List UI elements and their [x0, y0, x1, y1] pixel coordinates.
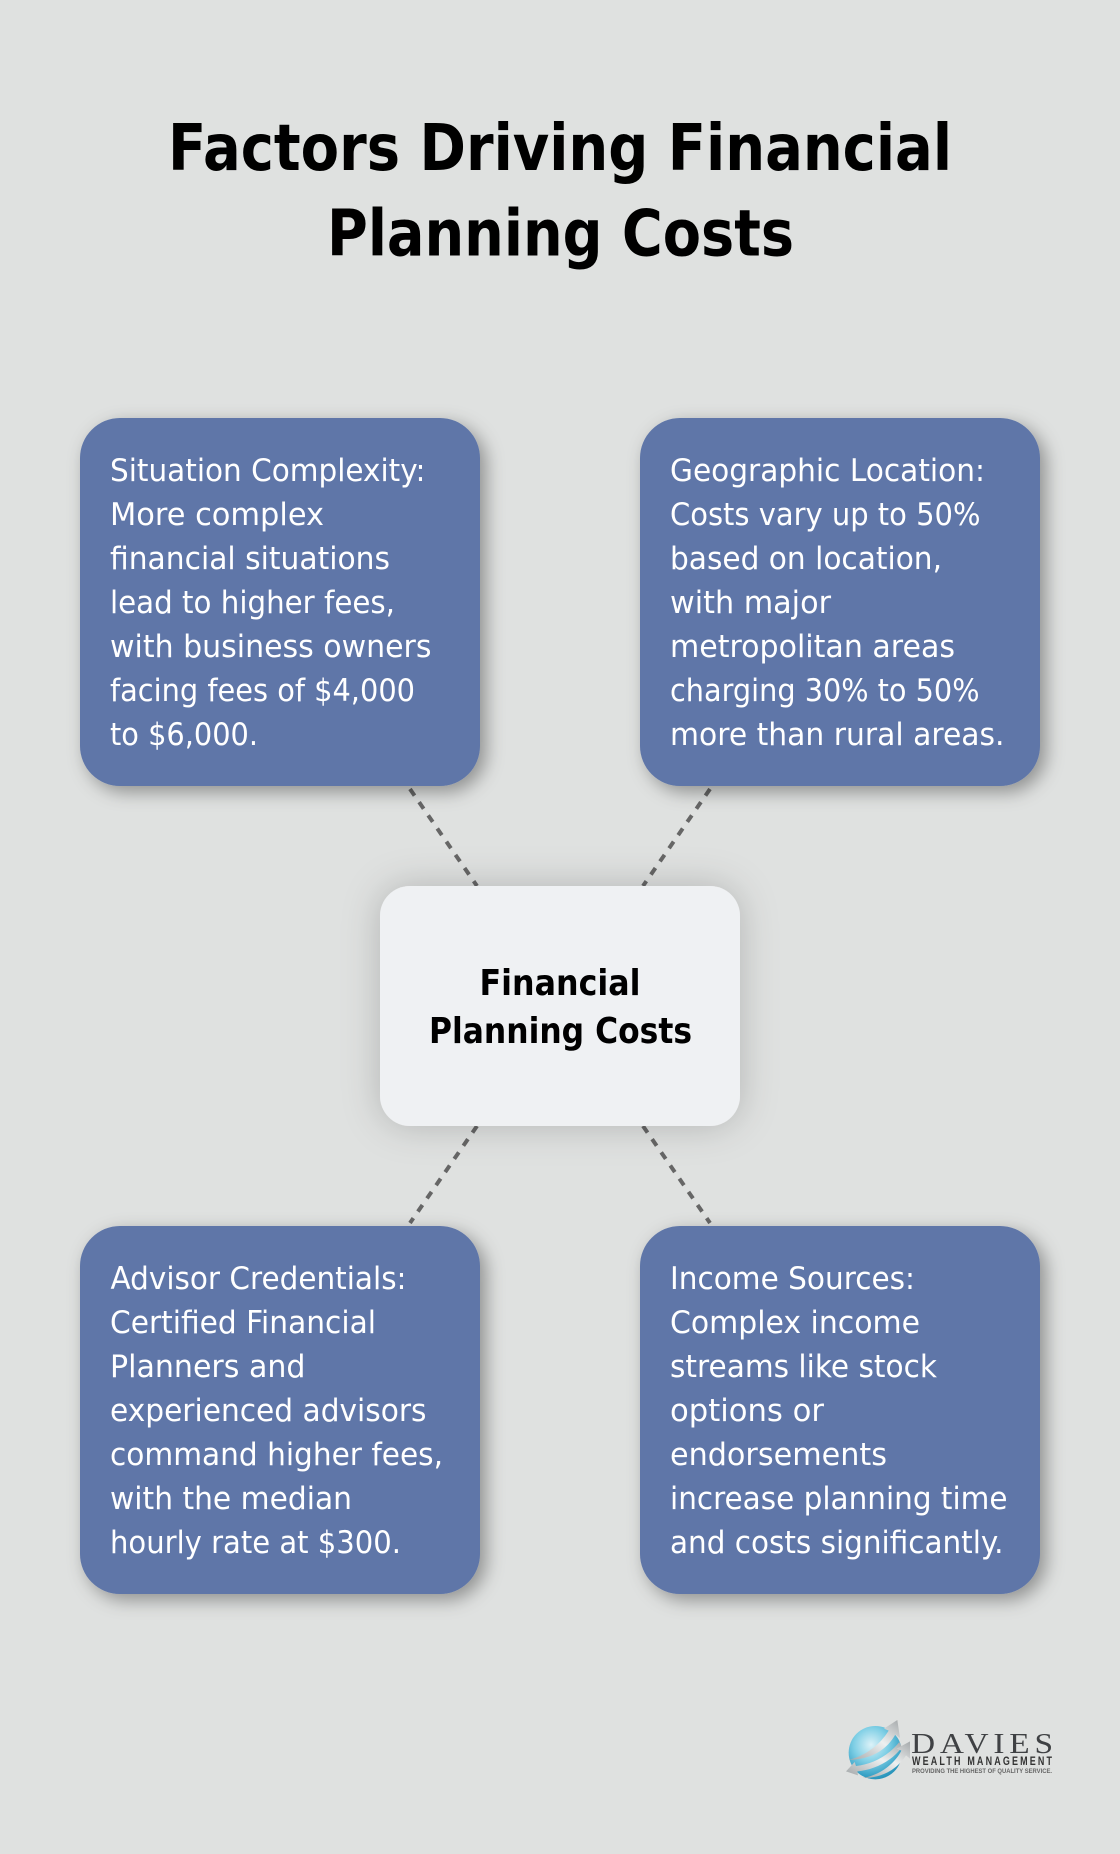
- panel: center node: Planning Costs: [429, 1011, 692, 1052]
- panel: advisor credentials: command higher fees,: [110, 1437, 443, 1473]
- title: Planning Costs: [327, 198, 794, 272]
- panel: income sources: Complex income: [670, 1305, 920, 1341]
- panel: advisor credentials: Planners and: [110, 1349, 306, 1385]
- panel: situation complexity: [80, 418, 480, 786]
- panel: center node: Financial: [480, 963, 640, 1004]
- panel: geographic location: Costs vary up to 50%: [670, 497, 980, 533]
- panel: situation complexity: lead to higher fees,: [110, 585, 395, 621]
- connector: geographic location to center: [643, 789, 710, 886]
- connector: situation complexity to center: [410, 789, 477, 886]
- panel: geographic location: based on location,: [670, 541, 942, 577]
- panel: advisor credentials: Certified Financial: [110, 1305, 376, 1341]
- panel: income sources: streams like stock: [670, 1349, 938, 1385]
- logo: Davies Wealth Management: WEALTH MANAGEMENT: [912, 1756, 1053, 1768]
- panel: advisor credentials: [80, 1226, 480, 1594]
- logo: Davies Wealth Management: DAVIES: [911, 1727, 1053, 1759]
- panel: situation complexity: Situation Complexity:: [110, 453, 426, 489]
- panel: income sources: [640, 1226, 1040, 1594]
- panel: income sources: endorsements: [670, 1437, 887, 1473]
- panel: situation complexity: financial situations: [110, 541, 390, 577]
- panel: advisor credentials: experienced advisors: [110, 1393, 426, 1429]
- panel: income sources: options or: [670, 1393, 824, 1429]
- panel: situation complexity: to $6,000.: [110, 717, 258, 753]
- panel: geographic location: [640, 418, 1040, 786]
- panel: advisor credentials: Advisor Credentials:: [110, 1261, 406, 1297]
- panel: advisor credentials: with the median: [110, 1481, 352, 1517]
- panel: geographic location: metropolitan areas: [670, 629, 955, 665]
- panel: situation complexity: More complex: [110, 497, 324, 533]
- panel: geographic location: more than rural areas.: [670, 717, 1004, 753]
- logo: Davies Wealth Management: [846, 1720, 1053, 1779]
- panel: income sources: and costs significantly.: [670, 1525, 1004, 1561]
- panel: center node: [380, 886, 740, 1126]
- title: Factors Driving Financial: [168, 112, 952, 186]
- panel: situation complexity: with business owners: [110, 629, 432, 665]
- title: [168, 112, 952, 272]
- panel: income sources: Income Sources:: [670, 1261, 915, 1297]
- panel: situation complexity: facing fees of $4,000: [110, 673, 415, 709]
- connector: advisor credentials to center: [410, 1126, 477, 1223]
- panel: geographic location: Geographic Location:: [670, 453, 985, 489]
- logo: Davies Wealth Management: PROVIDING THE HIGHEST OF QUALITY SERVICE.: [912, 1768, 1052, 1775]
- panel: geographic location: with major: [670, 585, 831, 621]
- icon: globe with arrows: [846, 1720, 910, 1779]
- panel: income sources: increase planning time: [670, 1481, 1008, 1517]
- connector: income sources to center: [643, 1126, 710, 1223]
- panel: geographic location: charging 30% to 50%: [670, 673, 980, 709]
- panel: advisor credentials: hourly rate at $300.: [110, 1525, 401, 1561]
